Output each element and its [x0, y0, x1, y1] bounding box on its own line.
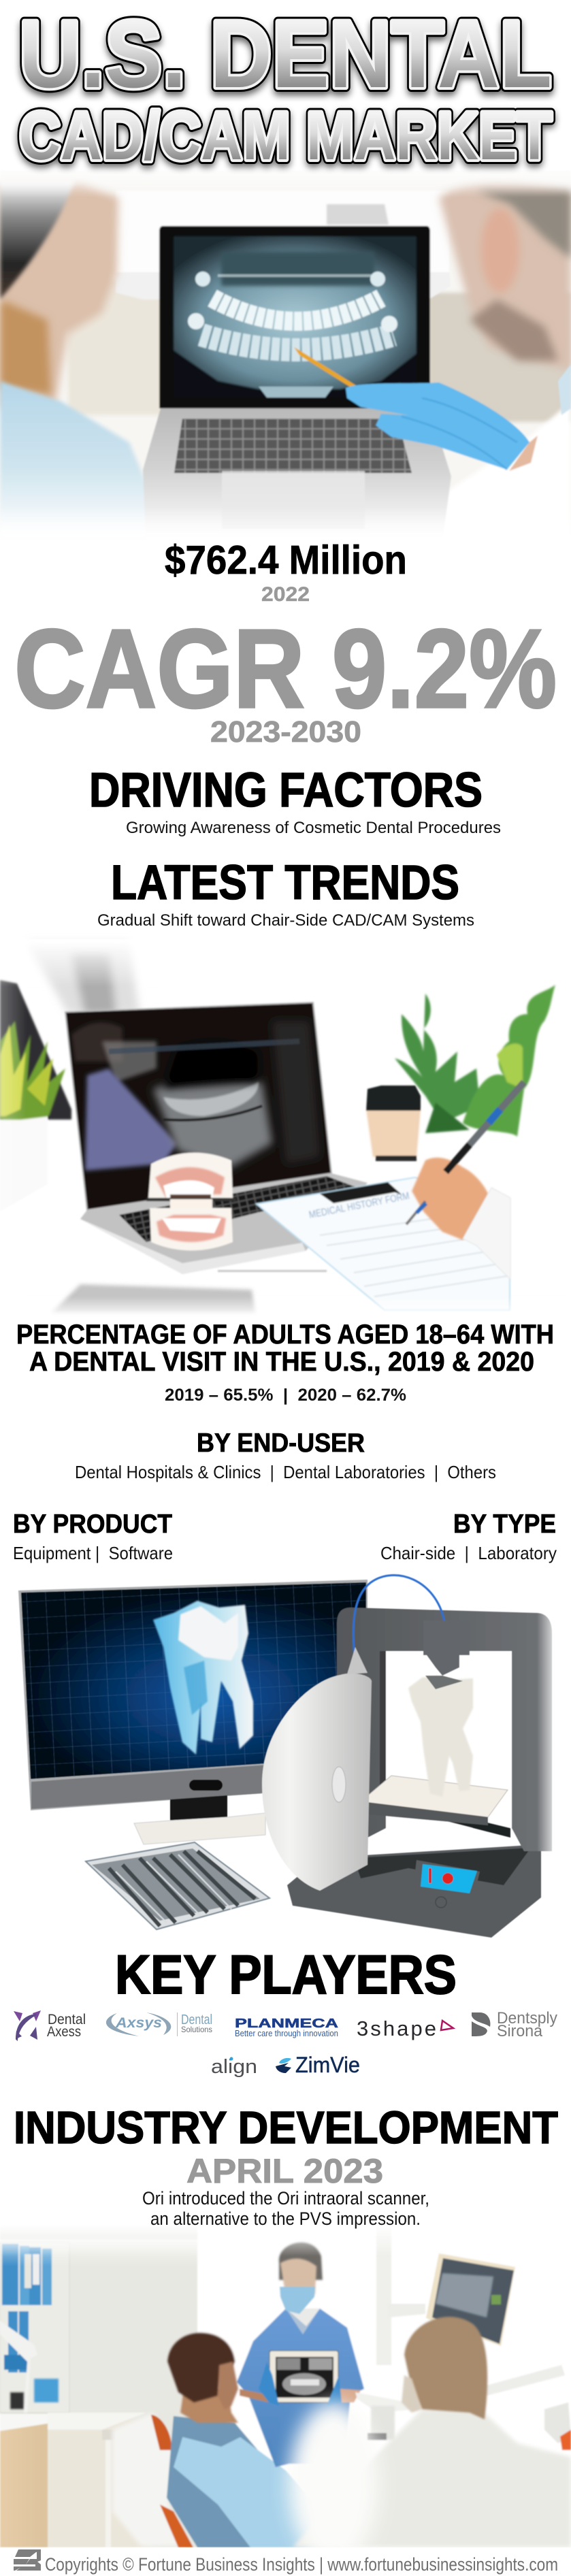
driving factors text: Growing Awareness of Cosmetic Dental Procedures: [126, 819, 501, 837]
build platform: [361, 1776, 508, 1817]
wrist: [509, 436, 538, 471]
logo: Axsys Dental Solutions: Dental: [181, 2012, 212, 2027]
dental lamp fixture right: [544, 2402, 571, 2443]
printer base: [287, 1844, 541, 1938]
heading: by product: BY PRODUCT: [13, 1510, 172, 1539]
left person shirt: [0, 381, 204, 538]
instruments and tablet on the table: [51, 1284, 255, 1314]
shelf with binders: [0, 2243, 69, 2413]
laptop screen x-ray: [71, 1021, 320, 1171]
laptop base: [80, 1173, 368, 1274]
monitor: [18, 1580, 368, 1844]
wall monitor with x-rays: [426, 2253, 515, 2346]
logo: align: align: [211, 2056, 257, 2078]
title shadow: [19, 5, 552, 177]
logo: Dental Axess: Dental: [48, 2012, 86, 2027]
logo: Dentsply Sirona: Dentsply: [497, 2009, 557, 2027]
type segments: Chair-side | Laboratory: [380, 1543, 557, 1563]
logo: Dental Axess: Axess: [47, 2024, 81, 2040]
heading: by end-user: BY END-USER: [197, 1429, 365, 1458]
photo: dental clinic consultation: [0, 2224, 571, 2566]
heading: percentage of adults: [16, 1320, 554, 1377]
blue filament cable: [353, 1576, 444, 1663]
monitor webcam: [189, 1780, 223, 1791]
title: [19, 1, 552, 177]
pencil: [294, 347, 358, 389]
end-user segments: Dental Hospitals & Clinics | Dental Laboratories | Others: [75, 1462, 496, 1482]
dentist seated, back view: [289, 2317, 571, 2566]
tooth on monitor: [153, 1601, 253, 1755]
pen: [406, 1082, 524, 1224]
heading: driving factors: DRIVING FACTORS: [89, 764, 483, 817]
printer control panel: [412, 1860, 480, 1914]
logo: Planmeca: Better care through innovation: [235, 2028, 338, 2038]
coffee cup: [366, 1086, 421, 1161]
photo: dentists reviewing x-ray on laptop: [0, 163, 571, 544]
left person head and neck: [0, 184, 118, 408]
printer head: [423, 1620, 470, 1676]
denture model: [146, 1153, 236, 1251]
heading: percentage of adults: A DENTAL VISIT IN THE U.S., 2019 & 2020: [29, 1347, 534, 1377]
heading: by type: BY TYPE: [453, 1510, 556, 1539]
logo: Dentsply Sirona: Sirona: [497, 2022, 543, 2040]
patient: [167, 2333, 340, 2547]
market size value: $762.4 Million: [165, 538, 407, 583]
development description: an alternative to the PVS impression.: [150, 2208, 421, 2229]
tool tray: [86, 1842, 270, 1929]
logo: Planmeca: [235, 2017, 338, 2038]
clipboard with medical form: MEDICAL HISTORY FORM: [308, 1190, 410, 1221]
logo: Dental Axess: [14, 2010, 86, 2040]
monitor stand: [170, 1795, 227, 1822]
printed tooth: [408, 1676, 473, 1797]
writing hand: [412, 1158, 491, 1240]
right person head: [439, 184, 571, 371]
logo: Axsys Dental Solutions: [106, 2012, 212, 2036]
dentist with tablet: [237, 2243, 364, 2467]
Fortune Business Insights logo: [14, 2549, 41, 2571]
laptop base: [143, 408, 451, 541]
left plant: [0, 1021, 65, 1120]
pole and light arm: [355, 2226, 565, 2440]
counter and cabinets: [0, 2413, 150, 2547]
dental chair: [112, 2413, 193, 2547]
logo: Dentsply Sirona: [472, 2009, 557, 2040]
right person coat: [408, 402, 571, 544]
logo: ZimVie: ZimVie: [295, 2053, 360, 2077]
printer frame: [337, 1608, 552, 1851]
development date: APRIL 2023: [186, 2152, 383, 2190]
left plant pot: [0, 1111, 48, 1211]
heading: key players: KEY PLAYERS: [115, 1944, 457, 2006]
printer door: [262, 1674, 372, 1891]
latest trends text: Gradual Shift toward Chair-Side CAD/CAM Systems: [97, 911, 474, 930]
tablet with x-ray: [270, 2351, 338, 2402]
heading: latest trends: LATEST TRENDS: [111, 856, 459, 910]
CAGR period: 2023-2030: [210, 715, 361, 749]
sleeve: [463, 1188, 510, 1279]
market size year: 2022: [261, 583, 310, 606]
laptop trackpad: [222, 471, 365, 529]
footer: [0, 2547, 571, 2576]
logo: Axsys Dental Solutions: Solutions: [181, 2025, 212, 2034]
laptop screen: [159, 226, 430, 408]
x-ray jaw image: [174, 236, 417, 397]
logo: Planmeca: PLANMECA: [235, 2017, 338, 2030]
blue glove: [346, 382, 529, 470]
right plant: [395, 985, 555, 1137]
illustration: monitor, 3D printer and tool tray: [18, 1576, 552, 1938]
logo: 3shape: 3shape: [357, 2017, 436, 2040]
dental visit statistics: 2019 – 65.5% | 2020 – 62.7%: [165, 1386, 406, 1405]
clipboard with medical form: [257, 1177, 510, 1310]
photo: laptop, denture model and clipboard: [0, 939, 571, 1317]
Dental Axess mark: [14, 2010, 41, 2040]
laptop keyboard: [174, 419, 412, 473]
product segments: Equipment | Software: [13, 1543, 173, 1563]
logo: Axsys Dental Solutions: Axsys: [115, 2015, 162, 2031]
development description: [142, 2188, 429, 2229]
laptop lid: [65, 1002, 331, 1210]
development description: Ori introduced the Ori intraoral scanner,: [142, 2188, 429, 2208]
